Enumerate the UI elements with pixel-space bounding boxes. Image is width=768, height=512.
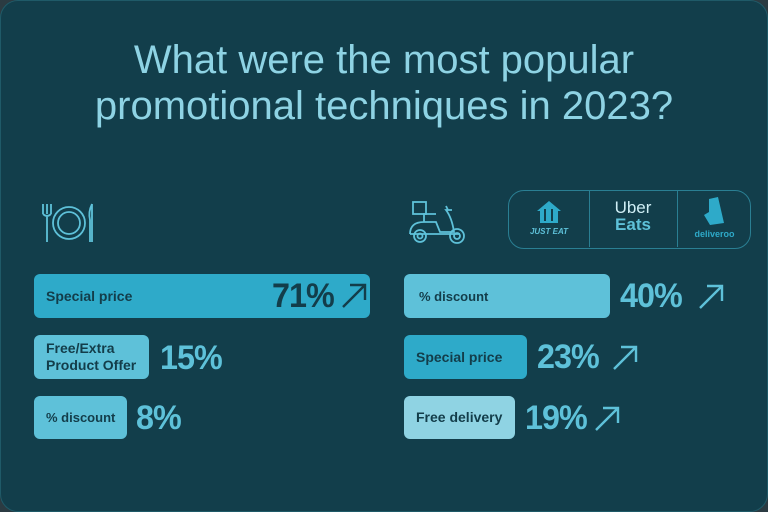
- value 15%: 15%: [160, 339, 222, 377]
- bar: special price right: Special price: [416, 348, 502, 364]
- logo: uber eats: Uber: [615, 198, 651, 217]
- logos panel: [508, 190, 751, 249]
- bar: % discount right: % discount: [419, 288, 488, 304]
- bar: free/extra product offer: Free/Extra: [46, 340, 114, 356]
- value 40%: 40%: [620, 277, 682, 315]
- arrow 19: [595, 406, 620, 431]
- bar: special price right: [404, 335, 527, 379]
- logo: deliveroo: [677, 191, 751, 247]
- logo: uber eats: Eats: [615, 215, 651, 234]
- value 8%: 8%: [136, 399, 181, 437]
- bar: free/extra product offer: Product Offer: [46, 357, 136, 373]
- logo: uber eats: [615, 198, 652, 234]
- value 19%: 19%: [525, 399, 587, 437]
- icon: scooter: [409, 201, 465, 244]
- title: [95, 38, 673, 128]
- bar: % discount left: % discount: [46, 410, 115, 425]
- title: promotional techniques in 2023?: [95, 84, 673, 128]
- logo: just eat: JUST EAT: [530, 227, 568, 236]
- bar: free delivery: Free delivery: [416, 409, 502, 425]
- arrow 40: [699, 284, 724, 309]
- value 23%: 23%: [537, 338, 599, 376]
- icon: plate with cutlery: [42, 204, 93, 242]
- arrow 23: [613, 346, 638, 370]
- title: What were the most popular: [134, 38, 634, 82]
- arrow 71: [342, 284, 366, 308]
- logo: deliveroo: deliveroo: [694, 229, 734, 239]
- bar: special price 71%: Special price: [46, 288, 132, 304]
- bar: % discount right: [404, 274, 610, 318]
- bar: free delivery: [404, 396, 515, 439]
- bar: special price 71%: [34, 274, 370, 318]
- value 71%: 71%: [272, 277, 334, 315]
- logo: just eat: [509, 191, 590, 247]
- bar: % discount left: [34, 396, 127, 439]
- bar: free/extra product offer: [34, 335, 149, 379]
